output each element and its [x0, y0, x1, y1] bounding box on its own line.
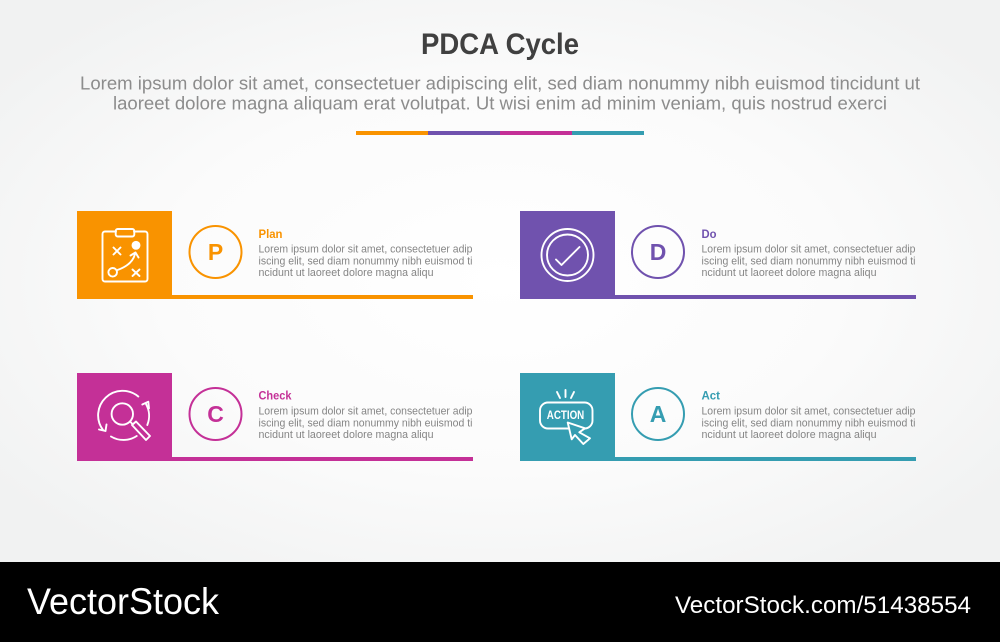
- letter circle A: A: [650, 401, 666, 427]
- plan description: ncidunt ut laoreet dolore magna aliqu: [258, 267, 434, 279]
- four-colour divider: [356, 131, 644, 135]
- do heading: Do: [702, 229, 716, 241]
- act description: iscing elit, sed diam nonummy nibh euismod ti: [702, 417, 916, 429]
- panel: do: [520, 211, 916, 299]
- do description: iscing elit, sed diam nonummy nibh euismod ti: [702, 255, 916, 267]
- subtitle text: [80, 72, 920, 113]
- icon: check mark in double circle: [542, 229, 594, 281]
- icon: magnifier in cycle arrows: [98, 391, 150, 440]
- letter circle C: [190, 388, 242, 440]
- letter circle A: [632, 388, 684, 440]
- act description: Lorem ipsum dolor sit amet, consectetuer adip: [702, 406, 916, 418]
- act description: [702, 406, 916, 441]
- footer image id: VectorStock.com/51438554: [675, 592, 971, 619]
- icon: clipboard with play diagram: [102, 229, 148, 282]
- plan description: iscing elit, sed diam nonummy nibh euismod ti: [258, 255, 472, 267]
- check heading: Check: [258, 390, 292, 402]
- subtitle text: laoreet dolore magna aliquam erat volutpat. Ut wisi enim ad minim veniam, quis nostrud exerci: [113, 92, 887, 113]
- subtitle text: Lorem ipsum dolor sit amet, consectetuer adipiscing elit, sed diam nonummy nibh euismod tincidunt ut: [80, 72, 920, 93]
- letter circle C: C: [207, 401, 224, 427]
- plan colour block and underline: [77, 211, 473, 299]
- check description: iscing elit, sed diam nonummy nibh euismod ti: [258, 417, 472, 429]
- do colour block and underline: [520, 211, 916, 299]
- act description: ncidunt ut laoreet dolore magna aliqu: [702, 429, 876, 441]
- panel: check: [77, 373, 473, 461]
- do description: [702, 244, 916, 279]
- check description: ncidunt ut laoreet dolore magna aliqu: [258, 429, 434, 441]
- plan description: Lorem ipsum dolor sit amet, consectetuer adip: [258, 244, 472, 256]
- plan heading: Plan: [258, 229, 282, 241]
- check colour block and underline: [77, 373, 473, 461]
- panel: act: [520, 373, 916, 461]
- letter circle D: [632, 226, 684, 278]
- letter circle D: D: [650, 239, 666, 265]
- check description: [258, 406, 472, 441]
- plan description: [258, 244, 472, 279]
- act colour block and underline: [520, 373, 916, 461]
- panel: plan: [77, 211, 473, 299]
- icon: action button with cursor: ACTION: [547, 410, 584, 422]
- footer logo text: VectorStock: [27, 581, 219, 622]
- footer bar: [0, 562, 1000, 642]
- icon: action button with cursor: [540, 390, 592, 444]
- letter circle P: P: [208, 239, 223, 265]
- letter circle P: [190, 226, 242, 278]
- do description: ncidunt ut laoreet dolore magna aliqu: [702, 267, 876, 279]
- do description: Lorem ipsum dolor sit amet, consectetuer adip: [702, 244, 916, 256]
- check description: Lorem ipsum dolor sit amet, consectetuer adip: [258, 406, 472, 418]
- act heading: Act: [702, 390, 720, 402]
- title: PDCA Cycle: [421, 28, 579, 61]
